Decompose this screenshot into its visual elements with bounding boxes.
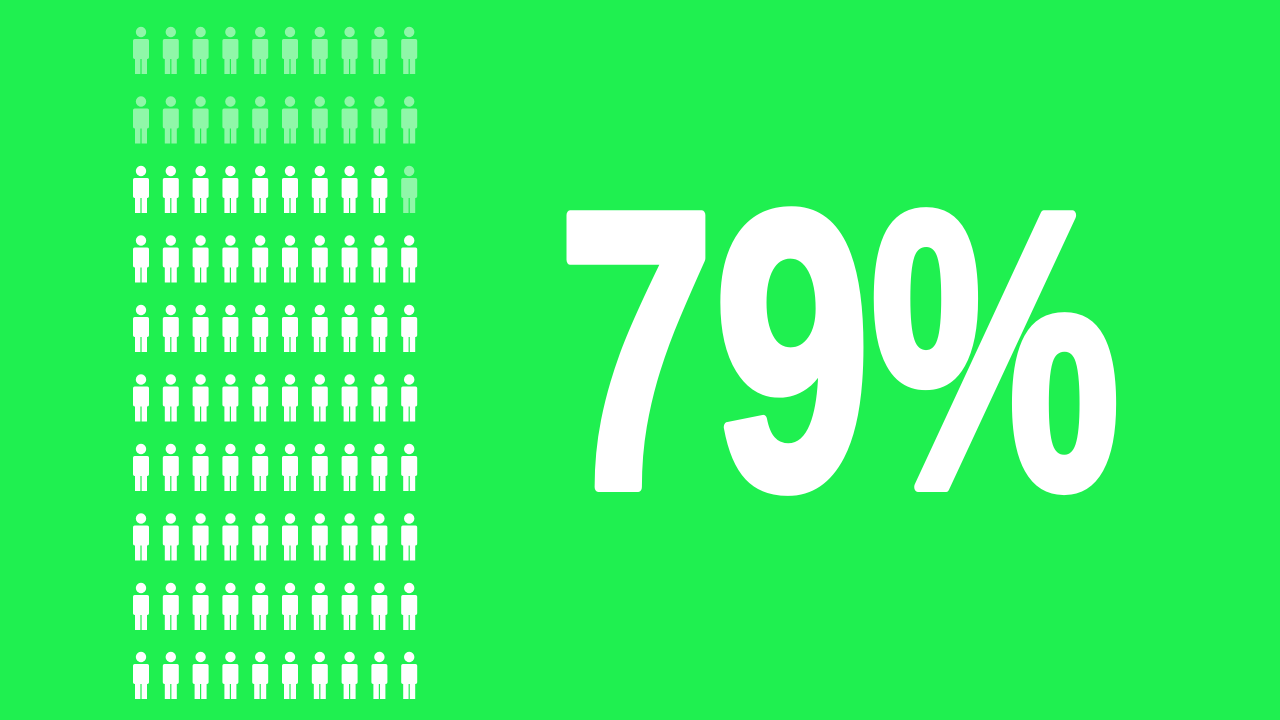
pictogram grid: 79 of 100 people (133, 27, 417, 699)
row 3 (9 filled, 1 faded) (133, 166, 417, 213)
faded row 2 (133, 96, 417, 144)
faded row 1 (133, 27, 417, 74)
filled rows 4-10 (133, 235, 417, 699)
